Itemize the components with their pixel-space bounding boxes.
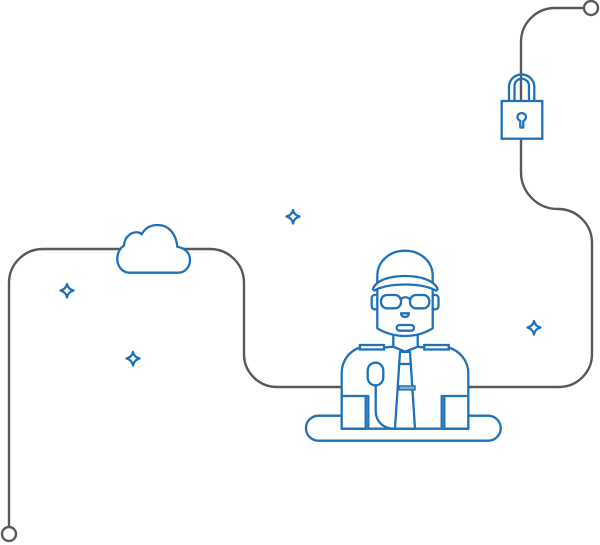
- guard neck: [393, 332, 418, 352]
- right cuff: [444, 396, 468, 429]
- icon: sparkle 4: [528, 321, 540, 334]
- right sleeve inner edge: [442, 396, 444, 429]
- microphone cord: [376, 385, 394, 429]
- left cuff: [342, 396, 366, 429]
- left sleeve shadow: [366, 396, 368, 429]
- icon: sparkle 3: [286, 210, 300, 224]
- left epaulette: [360, 345, 384, 350]
- platform: [306, 416, 501, 441]
- tie clip: [399, 386, 415, 390]
- icon: cloud: [117, 225, 190, 273]
- guard sunglasses: [381, 295, 429, 308]
- right sleeve: [442, 396, 468, 429]
- guard head: [377, 282, 433, 336]
- node: start circle: [2, 527, 16, 541]
- guard tie: [395, 352, 415, 429]
- left sleeve: [342, 396, 368, 429]
- guard nose: [401, 313, 409, 317]
- guard torso: [342, 347, 468, 429]
- icon: padlock: [502, 74, 542, 139]
- icon: sparkle 2: [126, 352, 140, 366]
- tie knot line: [399, 363, 411, 365]
- microphone head: [368, 363, 383, 385]
- padlock keyhole: [518, 113, 526, 128]
- padlock body: [502, 101, 542, 139]
- connector line: left: [9, 249, 345, 527]
- left sleeve inner edge: [366, 396, 368, 429]
- radio microphone: [368, 363, 394, 429]
- node: end circle: [584, 1, 598, 15]
- guard cap brim: [373, 276, 437, 290]
- security guard figure: [342, 251, 468, 429]
- bridge: [401, 297, 410, 299]
- guard right ear: [432, 295, 438, 309]
- icon: sparkle 1: [60, 284, 74, 298]
- right epaulette: [424, 345, 449, 350]
- left lens: [381, 295, 401, 308]
- padlock shackle: [509, 74, 534, 101]
- right lens: [410, 295, 429, 308]
- guard mouth: [397, 325, 414, 331]
- tie shape: [395, 352, 415, 429]
- guard left ear: [372, 295, 379, 309]
- connector line: right: [465, 8, 592, 387]
- right sleeve shadow: [442, 396, 444, 429]
- guard cap dome: [377, 251, 433, 282]
